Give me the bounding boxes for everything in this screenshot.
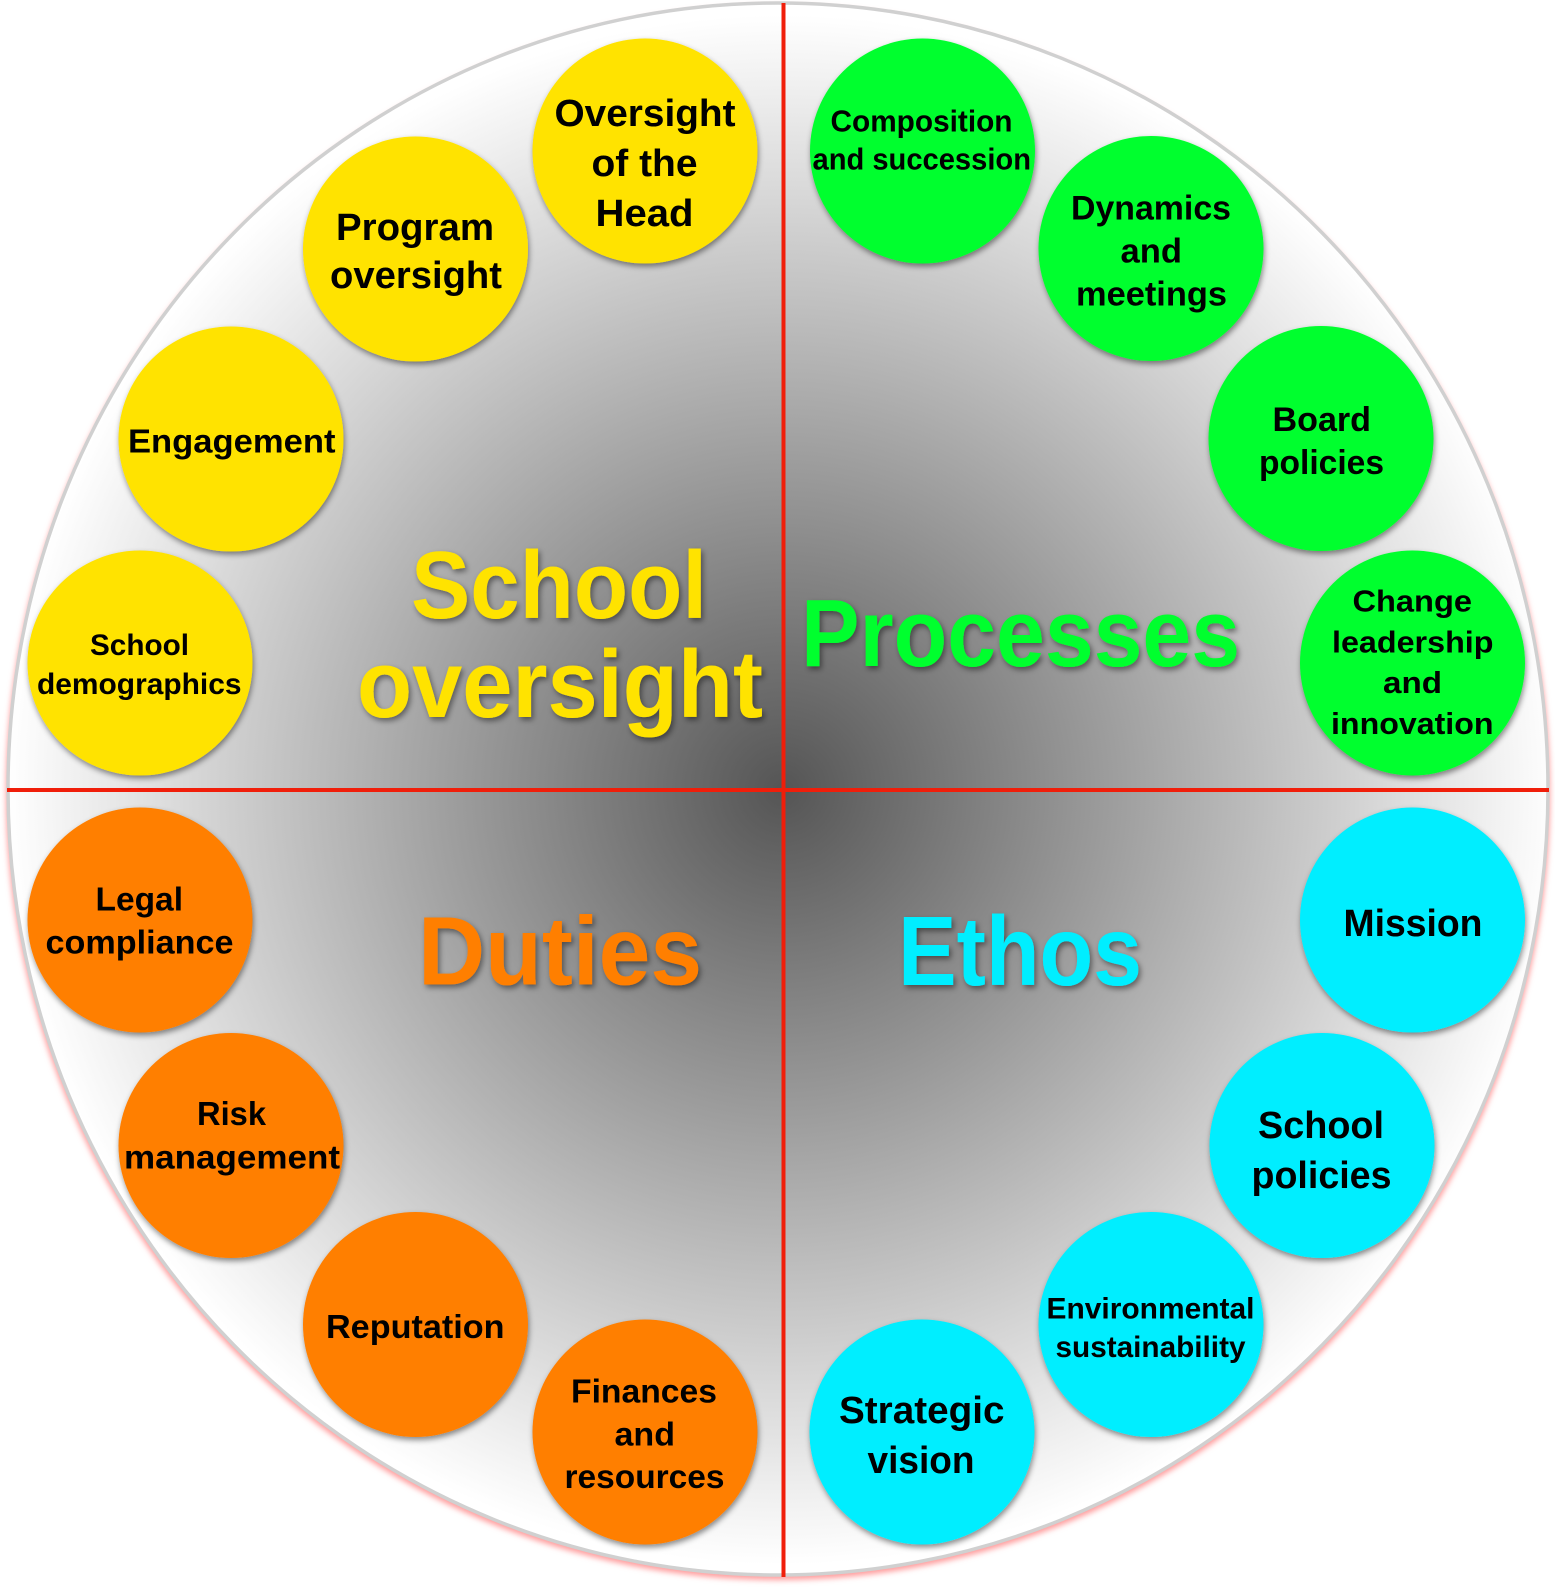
heading: Ethos: Ethos <box>898 896 1142 1006</box>
bubble: Finances and resources: resources <box>564 1458 724 1495</box>
bubble: Dynamics and meetings: and <box>1120 232 1182 270</box>
bubble: Program oversight: Program <box>336 207 494 249</box>
bubble: Board policies <box>1208 326 1434 551</box>
bubble: Change leadership and innovation: innovation <box>1331 706 1494 741</box>
bubble: Change leadership and innovation: leadership <box>1332 624 1494 660</box>
bubble: Program oversight: oversight <box>330 255 502 297</box>
bubble: Oversight of the Head: Oversight <box>554 93 736 135</box>
bubble: Board policies: Board <box>1272 401 1371 439</box>
bubble: Reputation: Reputation <box>326 1309 504 1346</box>
bubble: Strategic vision: vision <box>868 1440 974 1482</box>
heading: Duties: Duties <box>418 896 702 1006</box>
bubble: Finances and resources: and <box>614 1416 675 1452</box>
bubble: Risk management <box>118 1033 344 1258</box>
bubble: Finances and resources <box>532 1320 758 1544</box>
horizontal divider <box>7 788 1549 792</box>
bubble: Dynamics and meetings: meetings <box>1076 276 1227 314</box>
bubble: Finances and resources: Finances <box>571 1372 717 1410</box>
panel: School oversight <box>28 38 763 776</box>
bubble: Oversight of the Head: Head <box>596 193 694 235</box>
bubble: Strategic vision: Strategic <box>839 1390 1004 1432</box>
bubble: Legal compliance: compliance <box>46 924 234 962</box>
bubble: School demographics: School <box>90 629 189 662</box>
bubble: Oversight of the Head <box>532 38 758 264</box>
heading: Processes: Processes <box>801 580 1240 687</box>
bubble: Engagement <box>118 326 344 552</box>
bubble: Dynamics and meetings <box>1038 136 1264 361</box>
panel: Ethos <box>810 808 1525 1544</box>
bubble: Board policies: policies <box>1259 444 1384 482</box>
bubble: Composition and succession: Composition <box>830 104 1012 138</box>
bubble: Mission <box>1300 808 1525 1032</box>
heading: School oversight: School <box>411 532 707 639</box>
bubble: Legal compliance <box>28 808 252 1032</box>
bubble: Program oversight <box>303 136 528 362</box>
panel: Duties <box>28 808 758 1544</box>
bubble: School demographics: demographics <box>37 668 242 701</box>
bubble: Strategic vision <box>810 1320 1034 1544</box>
panel: Processes <box>801 38 1525 776</box>
vertical divider <box>782 3 786 1577</box>
bubble: School policies: policies <box>1252 1155 1392 1197</box>
bubble: Environmental sustainability <box>1038 1212 1264 1437</box>
bubble: Environmental sustainability: Environmental <box>1046 1292 1254 1326</box>
bubble: Legal compliance: Legal <box>96 882 183 918</box>
heading: School oversight <box>357 532 763 738</box>
bubble: Dynamics and meetings: Dynamics <box>1071 190 1231 228</box>
bubble: Composition and succession <box>810 38 1035 264</box>
bubble: Change leadership and innovation: Change <box>1352 584 1472 618</box>
bubble: Oversight of the Head: of the <box>592 143 698 185</box>
bubble: Engagement: Engagement <box>128 424 336 460</box>
bubble: School policies: School <box>1258 1105 1384 1147</box>
bubble: Risk management: Risk <box>197 1095 267 1132</box>
bubble: Risk management: management <box>124 1138 340 1176</box>
bubble: Change leadership and innovation: and <box>1383 665 1442 700</box>
bubble: Mission: Mission <box>1344 903 1482 945</box>
bubble: Composition and succession: and succession <box>812 142 1031 176</box>
bubble: Reputation <box>303 1212 528 1437</box>
heading: School oversight: oversight <box>357 631 763 738</box>
bubble: School demographics <box>28 550 252 776</box>
bubble: Change leadership and innovation <box>1300 550 1525 776</box>
bubble: Environmental sustainability: sustainability <box>1056 1331 1246 1364</box>
bubble: School policies <box>1210 1033 1434 1258</box>
